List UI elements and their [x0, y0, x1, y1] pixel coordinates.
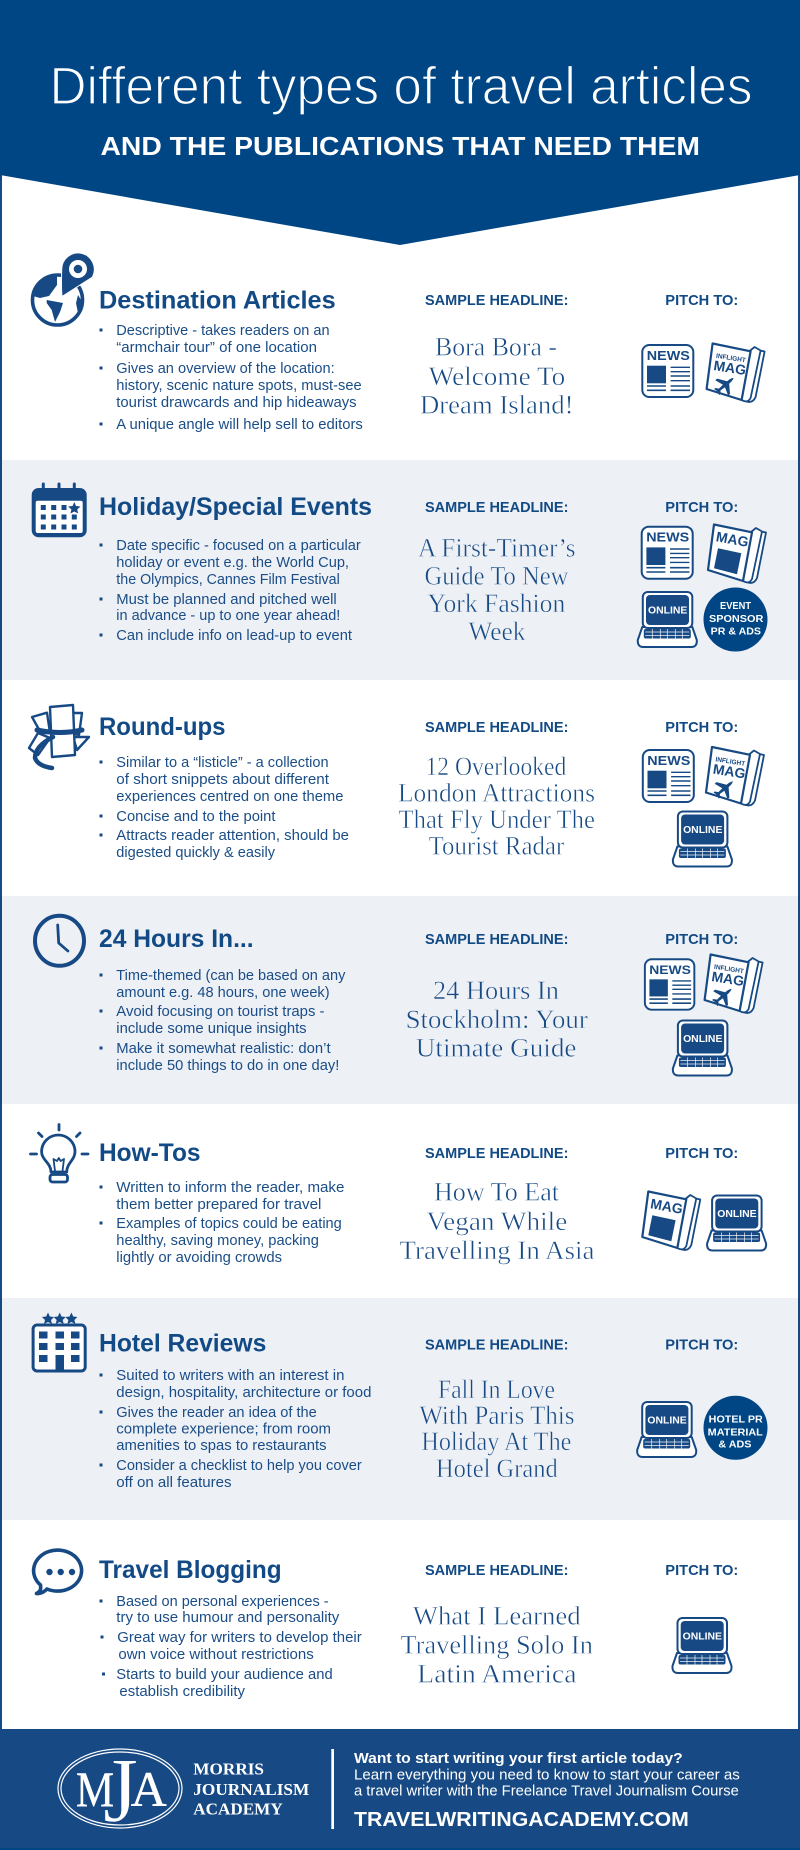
academy name [193, 1760, 309, 1819]
section: how-tos [30, 1124, 766, 1266]
bullet list: “armchair tour” of one location [116, 339, 317, 356]
icon: bundle of cards [29, 705, 89, 768]
bullet list: Time-themed (can be based on any [116, 967, 346, 984]
icon: clock [35, 916, 84, 966]
sample headline [420, 333, 574, 420]
section: 24 hours in [35, 916, 763, 1076]
panel: destination articles background [0, 0, 800, 460]
sample headline: Bora Bora - [435, 333, 557, 362]
icon: laptop [673, 812, 732, 866]
call to action: Learn everything you need to know to start your career as [354, 1766, 740, 1784]
pitch to label: PITCH TO: [665, 1336, 738, 1354]
sample headline: Travelling In Asia [400, 1236, 595, 1265]
bullet list: history, scenic nature spots, must-see [116, 377, 362, 394]
sample headline: Latin America [417, 1660, 577, 1689]
logo: MJA oval: M [76, 1761, 114, 1817]
icon: newspaper [642, 527, 693, 579]
panel: hotel reviews background [0, 1298, 800, 1520]
bullet list: Must be planned and pitched well [116, 591, 337, 608]
bullet list: A unique angle will help sell to editors [116, 416, 363, 433]
bullet list: amenities to spas to restaurants [116, 1437, 326, 1454]
heading: Holiday/Special Events [99, 493, 372, 521]
bullet list [100, 1367, 371, 1491]
bullet list: Concise and to the point [116, 808, 276, 825]
bullet list: Can include info on lead-up to event [116, 627, 353, 644]
badge: event sponsor pr and ads [704, 588, 768, 652]
sample headline: That Fly Under The [398, 805, 595, 834]
panel: how-tos background [0, 1104, 800, 1298]
sample headline: Hotel Grand [436, 1454, 558, 1483]
sample headline [400, 1601, 593, 1689]
sample headline label: SAMPLE HEADLINE: [425, 499, 568, 516]
logo: MJA oval [58, 1739, 182, 1841]
academy name: MORRIS [193, 1760, 264, 1779]
bullet list: Gives an overview of the location: [116, 360, 335, 377]
bullet list: digested quickly & easily [116, 844, 275, 861]
sample headline [418, 534, 576, 646]
bullet list: Date specific - focused on a particular [116, 537, 361, 554]
icon: laptop: ONLINE [683, 1034, 723, 1045]
sample headline: Stockholm: Your [406, 1005, 588, 1034]
bullet list [100, 1179, 344, 1266]
sample headline: Guide To New [424, 562, 569, 591]
pitch to label: PITCH TO: [665, 719, 738, 736]
bullet list: lightly or avoiding crowds [116, 1249, 282, 1266]
call to action: TRAVELWRITINGACADEMY.COM [354, 1809, 689, 1831]
icon: inflight magazine: MAG [710, 968, 745, 989]
bullet list: them better prepared for travel [116, 1196, 321, 1213]
pitch to label: PITCH TO: [665, 499, 738, 516]
icon: inflight magazine: MAG [712, 357, 747, 378]
icon: inflight magazine [706, 747, 764, 805]
sample headline label: SAMPLE HEADLINE: [425, 1336, 568, 1354]
badge: hotel pr material and ads: HOTEL PR [709, 1413, 763, 1425]
icon: light bulb [30, 1124, 88, 1182]
bullet list: include some unique insights [116, 1020, 307, 1037]
bullet list: Written to inform the reader, make [116, 1179, 344, 1196]
pitch to label: PITCH TO: [665, 1562, 738, 1579]
sample headline label: SAMPLE HEADLINE: [425, 292, 568, 309]
icon: newspaper: NEWS [646, 531, 689, 545]
bullet list: design, hospitality, architecture or food [116, 1384, 371, 1401]
bullet list: Attracts reader attention, should be [116, 827, 349, 844]
bullet list [100, 537, 361, 644]
icon: inflight magazine: INFLIGHT [715, 756, 746, 768]
bullet list: Gives the reader an idea of the [116, 1404, 317, 1421]
icon: speech bubble [34, 1550, 82, 1594]
icon: magazine: MAG [715, 528, 750, 550]
icon: laptop: ONLINE [648, 606, 688, 616]
bullet list [100, 1593, 362, 1700]
icon: laptop: ONLINE [647, 1416, 687, 1426]
subtitle: AND THE PUBLICATIONS THAT NEED THEM [100, 131, 700, 161]
sample headline label: SAMPLE HEADLINE: [425, 931, 568, 948]
sample headline: Tourist Radar [429, 831, 565, 860]
bullet list [100, 967, 346, 1074]
bullet list: experiences centred on one theme [116, 788, 343, 805]
section: travel blogging [34, 1550, 738, 1700]
icon: newspaper [643, 750, 694, 802]
icon: inflight magazine: INFLIGHT [713, 964, 744, 975]
academy name: ACADEMY [193, 1800, 283, 1819]
sample headline: Travelling Solo In [400, 1631, 593, 1660]
title: Different types of travel articles [50, 57, 752, 116]
bullet list: Examples of topics could be eating [116, 1215, 342, 1232]
sample headline: Dream Island! [420, 391, 574, 420]
heading: How-Tos [99, 1139, 200, 1167]
bullet list: own voice without restrictions [118, 1646, 314, 1663]
sample headline: Week [468, 617, 526, 646]
panel: 24 hours background [0, 896, 800, 1104]
bullet list: establish credibility [119, 1683, 245, 1700]
icon: hotel building [33, 1312, 85, 1371]
sample headline: 24 Hours In [433, 976, 559, 1005]
icon: laptop [707, 1196, 766, 1250]
panel: holiday background [0, 460, 800, 680]
section: destination articles [32, 253, 765, 433]
sample headline: London Attractions [398, 778, 595, 807]
academy name: JOURNALISM [193, 1780, 309, 1799]
bullet list: complete experience; from room [116, 1420, 331, 1437]
badge: hotel pr material and ads: MATERIAL [708, 1426, 763, 1438]
icon: newspaper: NEWS [647, 349, 690, 363]
sample headline label: SAMPLE HEADLINE: [425, 1562, 568, 1579]
sample headline [406, 976, 588, 1063]
bullet list [100, 322, 363, 433]
sample headline: York Fashion [428, 589, 565, 618]
sample headline: What I Learned [413, 1601, 581, 1630]
icon: laptop [673, 1020, 732, 1076]
panel: round-ups background [0, 680, 800, 896]
icon: newspaper: NEWS [647, 754, 690, 768]
sample headline: Vegan While [426, 1207, 567, 1236]
bullet list: off on all features [116, 1474, 232, 1491]
sample headline: Welcome To [429, 362, 565, 391]
bullet list: Based on personal experiences - [116, 1593, 329, 1610]
badge: hotel pr material and ads [704, 1396, 768, 1460]
bullet list: in advance - up to one year ahead! [116, 607, 340, 624]
icon: newspaper [645, 959, 694, 1010]
icon: laptop: ONLINE [683, 1632, 722, 1642]
heading: Destination Articles [99, 287, 336, 315]
bullet list: include 50 things to do in one day! [116, 1057, 339, 1074]
icon: laptop [638, 592, 697, 647]
sample headline: Holiday At The [421, 1427, 571, 1456]
sample headline [419, 1375, 574, 1483]
sample headline: With Paris This [419, 1401, 574, 1430]
section: holiday special events [32, 482, 767, 652]
icon: globe and map pin [32, 253, 94, 325]
icon: inflight magazine: MAG [712, 761, 747, 782]
heading: Travel Blogging [99, 1556, 282, 1584]
bullet list [100, 754, 349, 861]
bullet list: the Olympics, Cannes Film Festival [116, 571, 340, 588]
bullet list: Starts to build your audience and [116, 1666, 333, 1683]
badge: hotel pr material and ads: & ADS [718, 1438, 752, 1450]
sample headline: Utimate Guide [416, 1034, 576, 1063]
sample headline label: SAMPLE HEADLINE: [425, 719, 568, 736]
icon: inflight magazine [705, 954, 763, 1013]
bullet list: Great way for writers to develop their [117, 1629, 362, 1646]
header banner [0, 0, 800, 245]
sample headline: A First-Timer’s [418, 534, 576, 563]
icon: newspaper: NEWS [649, 963, 691, 977]
bullet list: healthy, saving money, packing [116, 1232, 319, 1249]
badge: event sponsor pr and ads: PR & ADS [711, 626, 761, 638]
icon: laptop: ONLINE [683, 825, 723, 836]
icon: magazine [642, 1192, 700, 1250]
icon: inflight magazine [707, 344, 765, 402]
sample headline [400, 1178, 595, 1265]
icon: magazine: MAG [649, 1195, 684, 1217]
bullet list: Suited to writers with an interest in [116, 1367, 344, 1384]
call to action [354, 1750, 740, 1831]
bullet list: Consider a checklist to help you cover [116, 1457, 362, 1474]
logo: MJA oval: A [131, 1761, 167, 1817]
bullet list: try to use humour and personality [116, 1609, 340, 1626]
icon: inflight magazine: INFLIGHT [715, 353, 746, 364]
bullet list: tourist drawcards and hip hideaways [116, 394, 357, 411]
panel: travel blogging background [0, 1520, 800, 1729]
bullet list: of short snippets about different [116, 771, 330, 788]
badge: event sponsor pr and ads: SPONSOR [709, 613, 764, 625]
heading: Hotel Reviews [99, 1330, 266, 1358]
sample headline: How To Eat [434, 1178, 560, 1207]
sample headline: 12 Overlooked [426, 752, 566, 781]
heading: 24 Hours In... [99, 925, 254, 953]
icon: laptop: ONLINE [717, 1209, 757, 1220]
section: hotel reviews [33, 1312, 768, 1491]
pitch to label: PITCH TO: [665, 931, 738, 948]
call to action: a travel writer with the Freelance Travel Journalism Course [354, 1783, 739, 1800]
bullet list: Make it somewhat realistic: don’t [116, 1040, 331, 1057]
icon: laptop [637, 1402, 696, 1457]
bullet list: holiday or event e.g. the World Cup, [116, 554, 349, 571]
icon: laptop [672, 1618, 732, 1673]
heading: Round-ups [99, 713, 226, 741]
pitch to label: PITCH TO: [665, 292, 738, 309]
icon: magazine [708, 524, 766, 583]
bullet list: Avoid focusing on tourist traps - [116, 1003, 324, 1020]
call to action: Want to start writing your first article today? [354, 1750, 683, 1767]
icon: newspaper [642, 345, 693, 397]
bullet list: Similar to a “listicle” - a collection [116, 754, 329, 771]
pitch to label: PITCH TO: [665, 1145, 738, 1162]
logo: MJA oval: J [103, 1739, 138, 1841]
icon: calendar [32, 482, 87, 537]
sample headline: Fall In Love [438, 1375, 555, 1404]
sample headline [398, 752, 595, 860]
section: round-ups [29, 705, 764, 866]
bullet list: amount e.g. 48 hours, one week) [116, 984, 330, 1001]
badge: event sponsor pr and ads: EVENT [720, 600, 752, 612]
sample headline label: SAMPLE HEADLINE: [425, 1145, 568, 1162]
bullet list: Descriptive - takes readers on an [116, 322, 330, 339]
footer [0, 1729, 800, 1850]
